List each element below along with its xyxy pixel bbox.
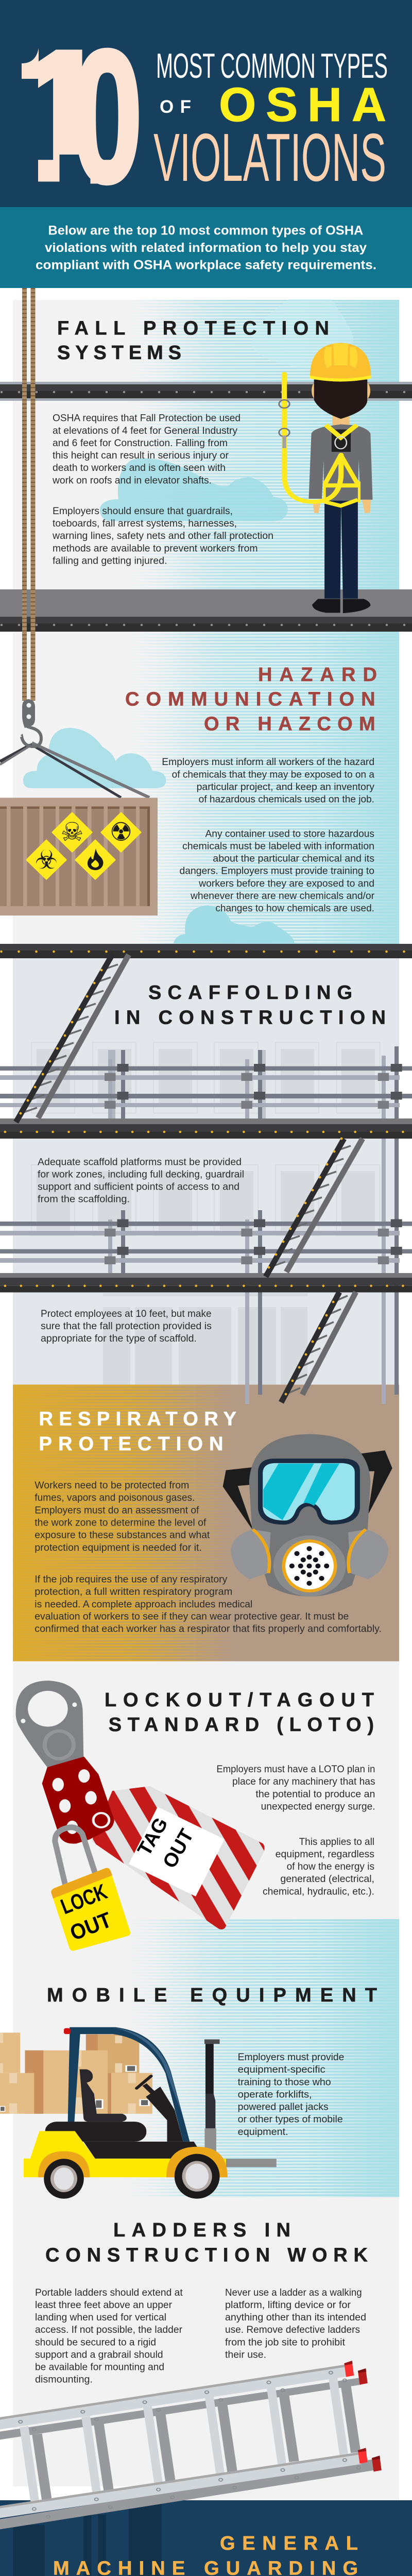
intro text: Below are the top 10 most common types of OSHA — [48, 224, 363, 238]
text: ladders left column: support and a grabrail should — [35, 2349, 163, 2360]
illustration: lock out padlock: OUT — [66, 1907, 115, 1945]
icon: skull hazard sign: ☠ — [61, 817, 83, 847]
text: lockout paragraphs: This applies to all — [299, 1837, 374, 1848]
text: fall protection paragraphs: methods are available to prevent workers from — [53, 543, 258, 554]
text: ladders left column: access. If not possible, the ladder — [35, 2325, 183, 2335]
title number 10: 0 — [72, 12, 143, 222]
icon: biohazard sign — [27, 840, 66, 879]
chassis — [24, 2131, 228, 2177]
rope — [25, 288, 33, 701]
illustration: tag out tag: TAG — [133, 1814, 173, 1860]
forklift wheels — [44, 2154, 220, 2199]
text: hazcom paragraphs: about the particular chemical and its — [213, 854, 374, 865]
heading: respiratory protection: RESPIRATORY — [39, 1409, 236, 1430]
text: hazcom paragraphs: Any container used to store hazardous — [205, 828, 374, 839]
text: hazcom paragraphs: chemicals must be labeled with information — [182, 841, 374, 852]
title number 10: 1 — [13, 12, 113, 222]
heading: fall protection systems — [57, 318, 329, 364]
text: lockout paragraphs: place for any machinery that has — [232, 1776, 375, 1787]
text: mobile equipment — [238, 2052, 344, 2138]
illustration: cargo container — [0, 798, 158, 916]
heading: mobile equipment: MOBILE EQUIPMENT — [47, 1985, 377, 2006]
text: mobile equipment: operate forklifts, — [238, 2090, 312, 2100]
text: respiratory paragraphs: exposure to these substances and what — [35, 1530, 210, 1541]
text: lockout paragraphs: Employers must have a LOTO plan in — [216, 1764, 375, 1775]
heading: ladders in construction work — [45, 2219, 368, 2266]
text: ladders left column: Portable ladders should extend at — [35, 2287, 183, 2298]
text: fall protection paragraphs: at elevations of 4 feet for General Industry — [53, 426, 238, 436]
icon: skull hazard sign — [53, 813, 92, 852]
text: scaffolding second paragraph: Protect employees at 10 feet, but make — [41, 1309, 212, 1319]
heading: general machine guarding — [53, 2533, 358, 2576]
text: fall protection paragraphs: Employers should ensure that guardrails, — [53, 506, 233, 517]
clouds: fall protection — [100, 299, 353, 521]
text: fall protection paragraphs: warning lines, safety nets and other fall protection — [52, 531, 273, 541]
illustration: lockout hasp — [16, 1681, 114, 1844]
illustration: ladder middle right — [266, 1138, 363, 1277]
cardboard boxes — [0, 2032, 152, 2114]
text: scaffolding second paragraph — [41, 1309, 212, 1344]
text: fall protection paragraphs — [52, 413, 273, 567]
heading: scaffolding in construction: IN CONSTRUCTION — [114, 1007, 386, 1028]
illustration: worker in harness — [279, 343, 372, 613]
text: ladders right column: anything other than its intended — [225, 2312, 366, 2323]
title word: OSHA: OSHA — [219, 78, 386, 131]
text: fall protection paragraphs: death to workers and is often seen with — [53, 463, 226, 473]
engine cover — [45, 2122, 146, 2142]
text: ladders left column: landing when used for vertical — [35, 2312, 166, 2323]
panel: striped sky background for fall protection and hazcom — [13, 300, 399, 944]
text: lockout paragraphs: the potential to produce an — [255, 1789, 375, 1800]
text: respiratory paragraphs: the work zone to determine the level of — [35, 1518, 207, 1529]
panel: scaffolding background — [13, 958, 399, 1385]
panel: paper background for lockout, mobile equipment and ladders — [13, 1661, 399, 2501]
illustration: lock out padlock: LOCK — [57, 1879, 110, 1919]
text: ladders left column: should be secured to a rigid — [35, 2337, 156, 2348]
heading: general machine guarding: GENERAL — [220, 2533, 358, 2554]
text: hazcom paragraphs: changes to how chemicals are used. — [215, 903, 374, 914]
icon: radiation hazard sign: ☢ — [110, 817, 132, 847]
icon: radiation hazard sign — [101, 813, 141, 852]
intro text — [36, 224, 376, 273]
heading: lockout tagout — [105, 1689, 374, 1736]
intro text: violations with related information to help you stay — [45, 241, 367, 255]
text: lockout paragraphs: equipment, regardless — [276, 1849, 374, 1860]
text: ladders right column: from the job site to prohibit — [225, 2337, 346, 2348]
text: lockout paragraphs: of how the energy is — [287, 1861, 374, 1872]
text: ladders right column: Never use a ladder as a walking — [225, 2287, 362, 2298]
text: mobile equipment: training to those who — [238, 2077, 331, 2088]
heading: respiratory protection — [39, 1409, 236, 1455]
forklift mast — [204, 2039, 277, 2167]
heading: hazard communication — [125, 664, 377, 735]
heading: fall protection systems: FALL PROTECTION — [57, 318, 329, 340]
text: mobile equipment: or other types of mobile — [238, 2114, 343, 2125]
illustration: extension ladder — [0, 2361, 382, 2529]
scaffold poles over respiratory panel — [245, 1384, 399, 1404]
illustration: tag out tag: OUT — [159, 1825, 198, 1872]
illustration: scaffold frame — [0, 1046, 412, 1404]
text: ladders right column: platform, lifting device or for — [225, 2300, 351, 2311]
text: mobile equipment: equipment. — [238, 2127, 288, 2138]
heading: fall protection systems: SYSTEMS — [57, 342, 181, 364]
text: fall protection paragraphs: toeboards, fall arrest systems, harnesses, — [53, 518, 237, 529]
text: fall protection paragraphs: work on roofs and in elevator shafts. — [52, 475, 212, 486]
heading: hazard communication: HAZARD — [258, 664, 377, 686]
text: respiratory paragraphs: protection, a full written respiratory program — [35, 1587, 232, 1598]
ladder red caps — [344, 2361, 382, 2471]
text: respiratory paragraphs: fumes, vapors and poisonous gases. — [35, 1493, 195, 1503]
text: hazcom paragraphs: of chemicals that they may be exposed to on a — [172, 769, 374, 780]
illustration: ladder over respiratory panel — [281, 1292, 356, 1402]
text: hazcom paragraphs: whenever there are new chemicals and/or — [190, 891, 375, 902]
text: ladders left column: least three feet above an upper — [35, 2300, 173, 2311]
text: mobile equipment: Employers must provide — [238, 2052, 344, 2063]
text: ladders right column: use. Remove defective ladders — [225, 2325, 360, 2335]
text: respiratory paragraphs: protection equipment is needed for it. — [35, 1543, 202, 1553]
illustration: crane hook and slings — [0, 699, 149, 798]
text: mobile equipment: powered pallet jacks — [238, 2102, 329, 2113]
text: lockout paragraphs — [216, 1764, 375, 1897]
heading: scaffolding in construction — [114, 982, 386, 1028]
text: scaffolding first paragraph: for work zones, including full decking, guardrail — [38, 1170, 244, 1180]
text: scaffolding second paragraph: appropriate for the type of scaffold. — [41, 1333, 197, 1344]
steering and dash — [136, 2076, 183, 2142]
text: respiratory paragraphs: Employers must do an assessment of — [35, 1505, 199, 1516]
ladder rivets — [19, 2371, 360, 2518]
text: scaffolding first paragraph: from the scaffolding. — [38, 1194, 130, 1205]
icon: flammable sign — [76, 840, 115, 879]
front rails — [0, 2366, 362, 2518]
text: hazcom paragraphs — [162, 757, 375, 914]
text: lockout paragraphs: generated (electrical, — [280, 1874, 374, 1885]
text: respiratory paragraphs: is needed. A complete approach includes medical — [35, 1599, 252, 1610]
icon: biohazard sign: ☣ — [35, 845, 58, 875]
text: hazcom paragraphs: dangers. Employers must provide training to — [179, 866, 374, 877]
text: scaffolding first paragraph — [38, 1157, 244, 1205]
heading: hazard communication: OR HAZCOM — [204, 713, 375, 735]
text: scaffolding second paragraph: sure that the fall protection provided is — [41, 1321, 212, 1332]
beam: hazcom floor with yellow rivets — [0, 944, 412, 958]
text: mobile equipment: equipment-specific — [238, 2064, 325, 2075]
panel: respiratory protection background — [13, 1385, 399, 1662]
illustration: tag out tag — [88, 1783, 268, 1932]
text: ladders left column: be available for mounting and — [35, 2362, 164, 2373]
text: respiratory paragraphs: confirmed that each worker has a respirator that fits properly and comfortably. — [35, 1624, 382, 1635]
text: ladders left column: dismounting. — [35, 2375, 93, 2385]
illustration: respirator mask — [223, 1434, 392, 1597]
text: ladders right column — [225, 2287, 366, 2360]
text: ladders right column: their use. — [225, 2349, 266, 2360]
text: hazcom paragraphs: particular project, and keep an inventory — [197, 782, 375, 792]
title word: of: OF — [160, 97, 191, 117]
text: respiratory paragraphs: If the job requires the use of any respiratory — [35, 1574, 228, 1585]
beam: upper scaffold beam — [0, 382, 412, 402]
beam: scaffold deck one — [0, 1118, 412, 1139]
text: fall protection paragraphs: falling and getting injured. — [53, 555, 167, 567]
text: hazcom paragraphs: Employers must inform all workers of the hazard — [162, 757, 374, 768]
illustration: forklift with boxes — [0, 2027, 277, 2199]
text: hazcom paragraphs: workers before they are exposed to and — [198, 878, 374, 889]
text: ladders left column — [35, 2287, 183, 2385]
illustration: lock out padlock — [51, 1827, 130, 1951]
text: lockout paragraphs: unexpected energy surge. — [261, 1801, 375, 1812]
text: respiratory paragraphs — [35, 1480, 382, 1635]
cabin frame — [64, 2027, 190, 2142]
clouds: hazcom — [23, 728, 294, 943]
heading: scaffolding in construction: SCAFFOLDING — [148, 982, 352, 1004]
heading: lockout tagout: LOCKOUT/TAGOUT — [105, 1689, 374, 1711]
text: fall protection paragraphs: this height can result in serious injury or — [53, 450, 229, 461]
text: respiratory paragraphs: Workers need to be protected from — [35, 1480, 189, 1491]
panel: header — [0, 0, 412, 222]
text: fall protection paragraphs: OSHA requires that Fall Protection be used — [53, 413, 241, 424]
text: lockout paragraphs: chemical, hydraulic, etc.). — [263, 1886, 374, 1897]
panel: striped background for mobile equipment — [13, 1919, 399, 2197]
text: scaffolding first paragraph: support and sufficient points of access to and — [38, 1182, 239, 1193]
illustration: ladder upper left — [16, 955, 129, 1122]
text: scaffolding first paragraph: Adequate scaffold platforms must be provided — [38, 1157, 242, 1167]
heading: ladders in construction work: LADDERS IN — [113, 2219, 290, 2241]
intro text: compliant with OSHA workplace safety requirements. — [36, 258, 376, 273]
text: respiratory paragraphs: evaluation of workers to see if they can wear protective gear. It must be — [35, 1612, 349, 1622]
beam: scaffold deck two — [0, 1273, 412, 1292]
text: hazcom paragraphs: of hazardous chemicals used on the job. — [199, 794, 374, 805]
heading: hazard communication: COMMUNICATION — [125, 688, 375, 710]
panel: machine guarding background — [0, 2500, 412, 2576]
beam: lower platform beam — [0, 589, 412, 632]
heading: respiratory protection: PROTECTION — [39, 1433, 224, 1455]
back rails — [0, 2378, 374, 2529]
text: fall protection paragraphs: and 6 feet for Construction. Falling from — [53, 438, 228, 449]
heading: lockout tagout: STANDARD (LOTO) — [109, 1714, 374, 1736]
panel: intro — [0, 207, 412, 288]
heading: ladders in construction work: CONSTRUCTION WORK — [45, 2244, 368, 2266]
driver seat — [80, 2070, 127, 2122]
